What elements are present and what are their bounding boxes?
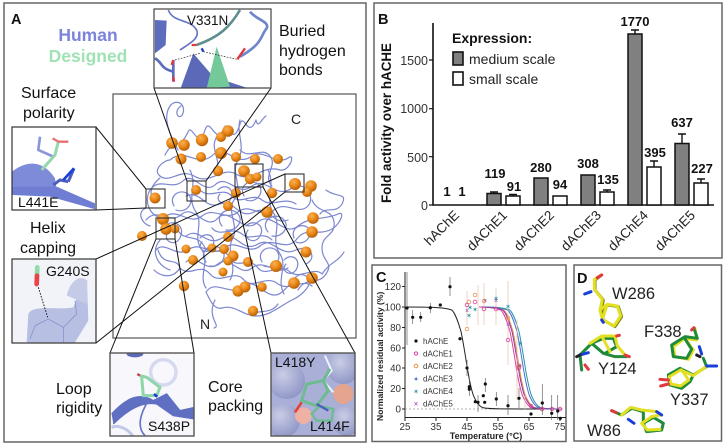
- designed variant data points: ×: [518, 363, 522, 370]
- bar value labels: 637: [671, 115, 693, 130]
- residue labels: W286: [612, 285, 655, 303]
- x tick labels: 45: [462, 422, 473, 433]
- residue labels: F338: [644, 323, 682, 341]
- connector lines: [96, 88, 355, 353]
- x tick labels: 65: [524, 422, 535, 433]
- legend: expression: [452, 30, 556, 87]
- residue F338: [672, 328, 702, 359]
- terminus labels: N: [200, 316, 210, 332]
- label: Surface polarity: Surface: [21, 85, 76, 102]
- label: Buried hydrogen bonds: hydrogen: [279, 43, 346, 60]
- bars: [487, 34, 708, 205]
- bar value labels: 308: [577, 156, 599, 171]
- panel: C melting curves: [372, 265, 566, 442]
- designed variant data points: ✶: [466, 312, 472, 320]
- axes: [402, 272, 566, 421]
- panel label D: D: [577, 271, 587, 287]
- designed variant data points: ✶: [493, 295, 499, 303]
- designed variant data points: ×: [465, 308, 469, 315]
- label: Surface polarity: polarity: [23, 105, 75, 122]
- axes: [429, 23, 714, 205]
- x category labels: hAChE: [421, 208, 462, 248]
- legend: variants: dAChE1: [423, 350, 453, 358]
- y tick labels: [385, 282, 402, 416]
- inset: S438P loop rigidity: S438P: [148, 418, 190, 434]
- designed variant data points: ✶: [472, 306, 478, 314]
- selection boxes: [146, 164, 304, 239]
- panel label A: A: [11, 12, 22, 28]
- label: Core packing: Core: [208, 379, 243, 396]
- bar value labels: 1770: [621, 14, 649, 29]
- x tick labels: 75: [555, 422, 566, 433]
- inset: V331N buried hydrogen bonds: V331N: [187, 13, 228, 28]
- residue Y337: [660, 358, 717, 388]
- x category labels: [421, 207, 698, 254]
- residue Y124: [577, 335, 629, 370]
- inset: L418Y / L414F core packing: L414F: [310, 418, 350, 434]
- terminus labels: C: [291, 111, 301, 127]
- bar value labels: 119: [485, 166, 505, 181]
- main structure box: [113, 94, 356, 338]
- y tick labels: [400, 54, 428, 213]
- x tick labels: 55: [493, 422, 504, 433]
- bar value labels: 395: [644, 145, 666, 160]
- y axis title: Fold activity over hACHE: [379, 43, 394, 203]
- legend: Human / Designed: Designed: [49, 46, 127, 66]
- y tick labels: 60: [390, 344, 402, 354]
- legend: Human / Designed: Human: [58, 25, 118, 45]
- panel label C: C: [376, 270, 387, 286]
- residue labels: Y337: [670, 391, 709, 409]
- bar value labels: [443, 14, 713, 199]
- residue W86: [612, 407, 663, 432]
- bar value labels: 280: [530, 160, 552, 175]
- label: Buried hydrogen bonds: [279, 23, 346, 79]
- inset: G240S helix capping: G240S: [46, 263, 90, 279]
- bar value labels: 135: [597, 172, 619, 187]
- label: Loop rigidity: Loop: [56, 381, 92, 398]
- y tick labels: 1000: [400, 102, 428, 116]
- designed variant data points: ✶: [517, 340, 523, 348]
- error bars: [490, 30, 705, 196]
- label: Helix capping: Helix: [30, 220, 66, 237]
- legend: variants: dAChE4: [423, 387, 453, 396]
- x tick labels: 35: [431, 422, 442, 433]
- residue W286: [585, 275, 622, 327]
- label: Core packing: packing: [208, 398, 263, 415]
- residue labels: W86: [587, 422, 621, 440]
- inset: L418Y / L414F core packing: [270, 352, 356, 437]
- legend: variants: dAChE2: [423, 362, 453, 371]
- y tick labels: 40: [390, 364, 402, 374]
- x category labels: dAChE1: [464, 208, 510, 254]
- legend: variants: [413, 337, 453, 408]
- inset: G240S helix capping: [12, 259, 96, 343]
- legend: variants: ×: [414, 400, 419, 408]
- bar value labels: 1: [443, 184, 451, 199]
- inset: L418Y / L414F core packing: L418Y: [275, 354, 316, 370]
- inset: L441E surface polarity: [12, 127, 96, 210]
- x category labels: dAChE4: [605, 207, 651, 254]
- designed variant data points: ×: [494, 298, 498, 305]
- residue labels: Y124: [598, 360, 637, 378]
- y tick labels: 0: [421, 199, 428, 213]
- panel label B: B: [378, 12, 388, 28]
- bar value labels: 227: [691, 161, 713, 176]
- label: Helix capping: [20, 220, 76, 257]
- designed variant data points: ×: [483, 298, 487, 305]
- y axis title: Normalized residual activity (%): [375, 291, 385, 421]
- y tick labels: 100: [385, 302, 402, 314]
- designed variant data points: ✶: [505, 303, 511, 311]
- legend: Human / Designed: [49, 25, 127, 66]
- terminus labels: [200, 111, 301, 332]
- panel: A protein design: [4, 3, 366, 442]
- x axis title: Temperature (°C): [450, 431, 522, 441]
- legend: expression: small scale: [469, 71, 538, 87]
- y tick labels: 0: [396, 404, 402, 416]
- label: Surface polarity: [21, 85, 76, 122]
- label: Helix capping: capping: [20, 240, 76, 257]
- fit curves: [406, 307, 562, 409]
- inset: S438P loop rigidity: [110, 351, 195, 437]
- hAChE data points: [405, 272, 562, 420]
- bar value labels: 94: [553, 177, 568, 192]
- designed variant data points: [465, 281, 562, 411]
- label: Loop rigidity: rigidity: [56, 400, 102, 417]
- protein backbone tangle: [141, 102, 344, 328]
- designed variant data points: ✶: [467, 304, 473, 312]
- label: Buried hydrogen bonds: Buried: [279, 23, 325, 40]
- y tick labels: 80: [390, 323, 402, 334]
- x tick labels: [400, 422, 566, 433]
- inset: L441E surface polarity: L441E: [18, 194, 58, 210]
- residue sticks: [577, 275, 717, 432]
- x category labels: dAChE5: [652, 208, 698, 254]
- legend: variants: hAChE: [423, 337, 448, 346]
- y tick labels: 20: [390, 384, 402, 395]
- label: Buried hydrogen bonds: bonds: [279, 62, 323, 79]
- legend: expression: medium scale: [469, 51, 556, 67]
- x tick labels: 25: [400, 422, 411, 433]
- inset: V331N buried hydrogen bonds: [154, 9, 271, 90]
- y tick labels: 500: [407, 151, 428, 165]
- label: Loop rigidity: [56, 381, 102, 417]
- legend: variants: ✶: [413, 388, 419, 396]
- panel: D active site residues: [574, 265, 722, 441]
- label: Core packing: [208, 379, 263, 415]
- x category labels: dAChE2: [511, 208, 557, 254]
- panel: B bar chart: [374, 3, 722, 258]
- bar value labels: 91: [507, 179, 521, 194]
- legend: variants: dAChE5: [423, 400, 453, 408]
- legend: expression: Expression:: [452, 30, 532, 46]
- legend: variants: dAChE3: [423, 374, 453, 384]
- orange mutation spheres: [137, 125, 319, 316]
- y tick labels: 1500: [400, 54, 428, 68]
- designed variant data points: ×: [506, 322, 510, 329]
- y tick labels: 120: [385, 282, 402, 293]
- residue labels: [587, 285, 709, 440]
- bar value labels: 1: [458, 184, 466, 199]
- legend: variants: ✦: [413, 376, 419, 384]
- x category labels: dAChE3: [558, 208, 604, 254]
